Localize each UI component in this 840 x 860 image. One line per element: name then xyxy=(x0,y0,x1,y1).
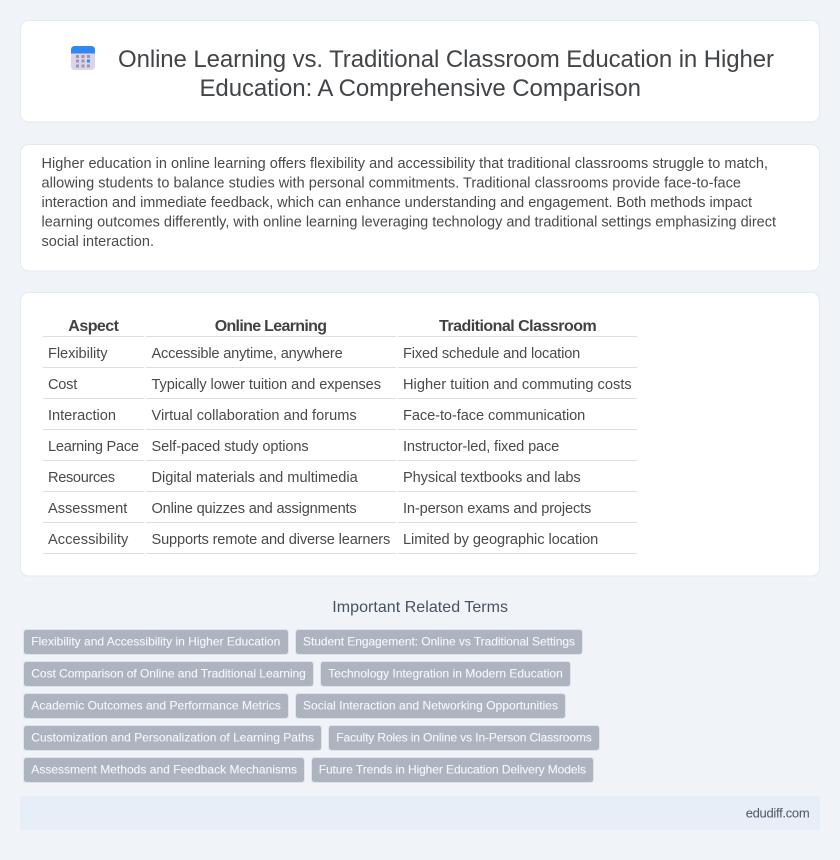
table row: cost: Cost xyxy=(48,377,77,393)
tag: Technology Integration in Modern Education xyxy=(328,667,563,681)
table row: flexibility: Flexibility xyxy=(48,346,108,362)
tag: Academic Outcomes and Performance Metrics xyxy=(31,699,281,713)
table row: cost: Typically lower tuition and expenses xyxy=(152,377,381,393)
icon: calendar xyxy=(71,46,95,70)
tag: Cost Comparison of Online and Traditional Learning xyxy=(31,667,306,681)
text block: introduction paragraph xyxy=(42,156,776,250)
table row: cost xyxy=(43,377,637,399)
table row: interaction: Virtual collaboration and forums xyxy=(152,408,357,424)
tag: Social Interaction and Networking Opportunities xyxy=(303,699,558,713)
table row: interaction: Face-to-face communication xyxy=(403,408,585,424)
tag: Student Engagement: Online vs Traditional Settings xyxy=(303,635,575,649)
table header row xyxy=(43,318,637,337)
table row: assessment: In-person exams and projects xyxy=(403,501,591,517)
footer xyxy=(20,796,820,830)
tag xyxy=(320,662,570,686)
tag: Future Trends in Higher Education Delivery Models xyxy=(319,763,586,777)
table row: learning pace: Self-paced study options xyxy=(152,439,309,455)
tag xyxy=(24,726,322,750)
table row: assessment: Online quizzes and assignments xyxy=(152,501,357,517)
table row: resources: Digital materials and multimedia xyxy=(152,470,359,486)
table row: cost: Higher tuition and commuting costs xyxy=(403,377,632,393)
tag: Faculty Roles in Online vs In-Person Classrooms xyxy=(336,731,592,745)
table row: accessibility xyxy=(43,532,637,554)
table row: resources: Resources xyxy=(48,470,115,486)
tag xyxy=(24,694,288,718)
text block: introduction paragraph: social interaction. xyxy=(42,234,154,250)
table row: flexibility: Fixed schedule and location xyxy=(403,346,580,362)
tag xyxy=(296,694,566,718)
title: Education: A Comprehensive Comparison xyxy=(200,75,641,102)
tag: Flexibility and Accessibility in Higher Education xyxy=(31,635,280,649)
text block: introduction paragraph: Higher education in online learning offers flexibility and accessibility that traditional classrooms struggle to match, xyxy=(42,156,768,172)
table header row: Aspect xyxy=(68,318,120,335)
table row: interaction: Interaction xyxy=(48,408,116,424)
panel: comparison table xyxy=(20,292,820,576)
table header row: Traditional Classroom xyxy=(439,318,597,335)
tag: Assessment Methods and Feedback Mechanisms xyxy=(31,763,297,777)
title xyxy=(118,46,774,102)
text block: introduction paragraph: interaction and immediate feedback, which can enhance understanding and engagement. Both methods impact xyxy=(42,195,752,211)
tag xyxy=(24,758,304,782)
table row: resources: Physical textbooks and labs xyxy=(403,470,581,486)
tag xyxy=(296,630,582,654)
table row: learning pace: Instructor-led, fixed pace xyxy=(403,439,559,455)
table row: flexibility xyxy=(43,346,637,368)
table row: resources xyxy=(43,470,637,492)
footer brand: edudiff.com xyxy=(746,805,810,820)
table row: accessibility: Supports remote and diverse learners xyxy=(152,532,390,548)
tag: Customization and Personalization of Learning Paths xyxy=(31,731,314,745)
table row: interaction xyxy=(43,408,637,430)
heading: important related terms: Important Related Terms xyxy=(332,599,508,616)
table row: accessibility: Limited by geographic location xyxy=(403,532,598,548)
table header row: Online Learning xyxy=(215,318,327,335)
table row: assessment xyxy=(43,501,637,523)
table row: assessment: Assessment xyxy=(48,501,127,517)
tag xyxy=(312,758,594,782)
text block: introduction paragraph: learning outcomes differently, with online learning leveraging technology and traditional settings emphasizing direct xyxy=(42,214,776,230)
title: Online Learning vs. Traditional Classroom Education in Higher xyxy=(118,46,774,73)
text block: introduction paragraph: allowing students to balance studies with personal commitments. Traditional classrooms provide face-to-face xyxy=(42,176,741,192)
table row: flexibility: Accessible anytime, anywhere xyxy=(152,346,343,362)
table row: accessibility: Accessibility xyxy=(48,532,129,548)
panel: header xyxy=(20,20,820,122)
tag list: related terms xyxy=(24,630,600,782)
tag xyxy=(24,662,314,686)
panel: introduction xyxy=(20,144,820,271)
tag xyxy=(328,726,600,750)
table row: learning pace: Learning Pace xyxy=(48,439,139,455)
table row: learning pace xyxy=(43,439,637,461)
tag xyxy=(24,630,288,654)
